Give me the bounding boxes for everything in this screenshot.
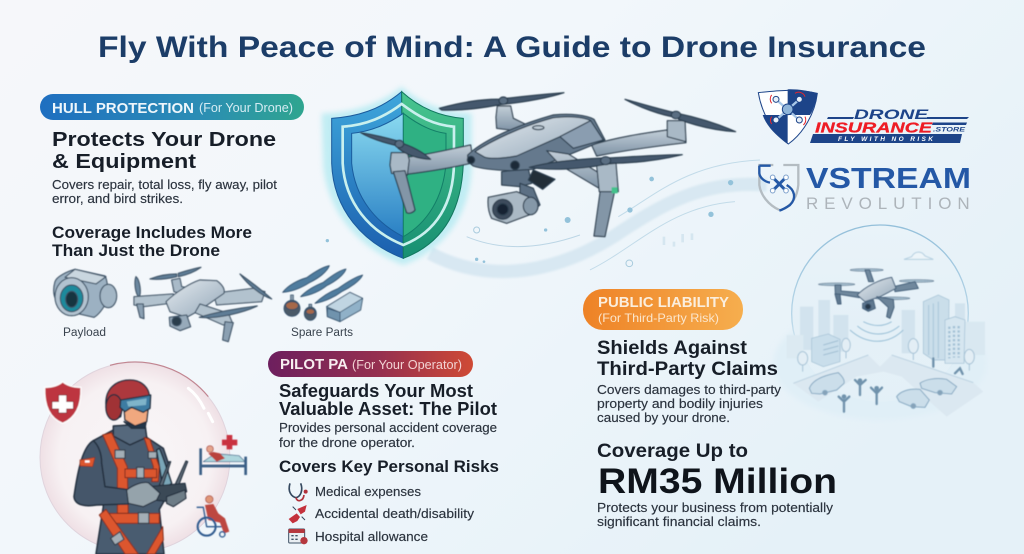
illustration: liability bubble bbox=[773, 225, 987, 420]
pilot arm bbox=[74, 441, 132, 506]
wheelchair icon bbox=[197, 496, 229, 537]
drone bbox=[818, 269, 934, 318]
logo: drone insurance store: DRONE bbox=[854, 107, 929, 122]
city bbox=[787, 300, 985, 358]
icon: payload camera bbox=[54, 269, 117, 317]
rear-right arm, motor and prop bbox=[592, 130, 686, 156]
coverage description: Protects your business from potentially bbox=[597, 501, 834, 515]
panel: public liability bbox=[583, 289, 837, 529]
shield badge bbox=[45, 382, 81, 423]
signal arcs bbox=[850, 322, 903, 341]
panel: pilot pa bbox=[268, 351, 499, 544]
panel: hull protection bbox=[40, 94, 363, 342]
bubble bbox=[40, 362, 230, 552]
payload label: Payload bbox=[63, 327, 106, 339]
panel: logos bbox=[758, 89, 976, 213]
pilot pa pill bbox=[268, 351, 473, 377]
public liability heading: Shields Against bbox=[597, 338, 748, 359]
roads bbox=[793, 355, 983, 417]
front-right arm, motor, leg and prop bbox=[547, 151, 599, 188]
pilot pa pill: PILOT PA bbox=[280, 356, 348, 373]
head bbox=[106, 380, 151, 428]
public liability description: Covers damages to third-party bbox=[597, 383, 782, 397]
trees bbox=[798, 338, 974, 372]
hull description: Covers repair, total loss, fly away, pilot bbox=[52, 178, 278, 192]
public liability pill: PUBLIC LIABILITY bbox=[598, 295, 729, 311]
list item: accidental death or disability bbox=[289, 505, 475, 523]
coverage amount: RM35 Million bbox=[598, 461, 837, 501]
title: Fly With Peace of Mind: A Guide to Drone Insurance bbox=[98, 31, 926, 64]
public liability pill: (For Third-Party Risk) bbox=[598, 311, 719, 325]
bubble bbox=[792, 225, 968, 402]
icon: spare parts bbox=[283, 266, 363, 322]
illustration: pilot in bubble bbox=[40, 362, 246, 554]
pilot pa heading: Valuable Asset: The Pilot bbox=[279, 399, 497, 419]
people bbox=[839, 358, 963, 412]
hull heading: & Equipment bbox=[52, 150, 196, 173]
pilot pa description: for the drone operator. bbox=[279, 436, 415, 450]
pilot pa heading: Safeguards Your Most bbox=[279, 381, 473, 401]
hull subheading: Than Just the Drone bbox=[52, 242, 220, 260]
pilot pa pill: (For Your Operator) bbox=[352, 358, 462, 372]
hull description: error, and bird strikes. bbox=[52, 192, 183, 206]
rear-left motor and prop bbox=[496, 106, 525, 131]
logo: drone insurance store: .STORE bbox=[933, 126, 966, 134]
hull subheading: Coverage Includes More bbox=[52, 224, 252, 242]
logo: drone insurance store: FLY WITH NO RISK bbox=[838, 136, 934, 143]
pilot torso bbox=[93, 424, 172, 554]
arm patch bbox=[80, 457, 95, 467]
spare parts label: Spare Parts bbox=[291, 327, 353, 339]
ground glow bbox=[773, 307, 987, 420]
pilot pa description: Provides personal accident coverage bbox=[279, 421, 497, 435]
cars bbox=[809, 373, 957, 408]
cloud bbox=[904, 252, 933, 259]
pilot pa subheading: Covers Key Personal Risks bbox=[279, 457, 499, 476]
public liability pill bbox=[583, 289, 743, 330]
gimbal and camera bbox=[502, 168, 532, 187]
logo: drone insurance store: INSURANCE bbox=[815, 120, 933, 136]
public liability heading: Third-Party Claims bbox=[597, 359, 778, 380]
list item: hospital allowance: Hospital allowance bbox=[315, 530, 428, 544]
public liability description: caused by your drone. bbox=[597, 411, 730, 425]
public liability description: property and bodily injuries bbox=[597, 397, 763, 411]
hull protection pill: HULL PROTECTION bbox=[52, 100, 194, 117]
hull heading: Protects Your Drone bbox=[52, 128, 276, 151]
coverage heading: Coverage Up to bbox=[597, 441, 748, 462]
icon: small drone bbox=[134, 267, 272, 342]
icon: shield bbox=[322, 87, 472, 265]
harness bbox=[99, 433, 163, 554]
front-left arm, motor, leg and prop bbox=[406, 145, 473, 174]
icon: hero drone bbox=[361, 93, 736, 237]
drone body bbox=[468, 114, 605, 171]
logo: drone insurance store bbox=[758, 89, 969, 144]
list item: accidental death or disability: Accidental death/disability bbox=[315, 507, 475, 521]
logo: vstream revolution: VSTREAM bbox=[806, 163, 971, 195]
bed icon bbox=[201, 446, 246, 475]
list item: medical expenses bbox=[289, 483, 421, 501]
coverage description: significant financial claims. bbox=[597, 515, 761, 529]
logo: vstream revolution: REVOLUTION bbox=[806, 194, 976, 213]
hull protection pill bbox=[40, 94, 304, 120]
decorative swoosh bbox=[326, 160, 767, 271]
logo: vstream revolution bbox=[759, 163, 976, 213]
controller and gloves bbox=[127, 461, 188, 507]
list item: medical expenses: Medical expenses bbox=[315, 485, 421, 499]
hull protection pill: (For Your Drone) bbox=[199, 101, 293, 115]
list item: hospital allowance bbox=[289, 529, 428, 544]
